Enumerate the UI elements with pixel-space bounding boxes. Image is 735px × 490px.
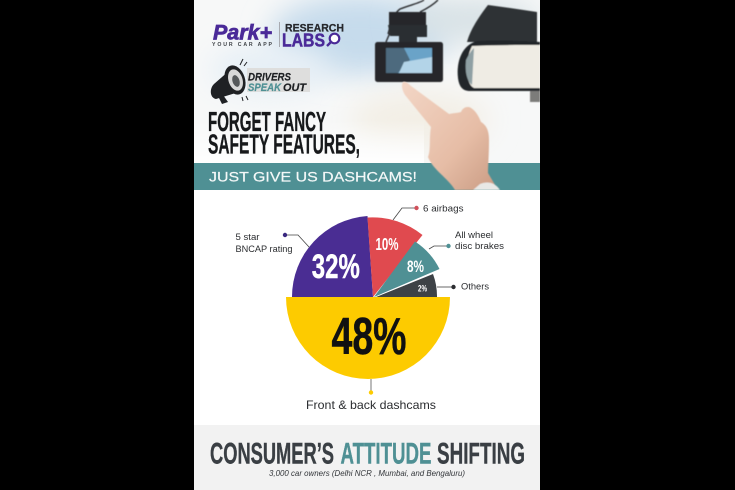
header photo: dashcam and mirror [194,0,540,190]
callout: others [437,282,490,292]
logo: Park+: YOUR CAR APP [212,42,273,48]
slice: BNCAP 32% [292,216,373,297]
banner text: JUST GIVE US DASHCAMS! [209,168,417,184]
rear view mirror [458,5,540,102]
callout: 5 star BNCAP rating [236,232,309,254]
white poster panel [194,0,540,490]
callout: 6 airbags: 6 airbags [423,204,464,214]
logo: Park+: Park+ [213,22,272,44]
value labels [312,234,427,366]
callout: all wheel disc brakes [429,230,505,251]
infographic canvas [194,0,540,490]
dashcam device [375,0,443,82]
hand pointing at dashcam [402,82,500,190]
headline: SAFETY FEATURES, [208,128,360,160]
headline [208,106,360,160]
logo: Research Labs: LABS [282,30,325,50]
footer title: CONSUMER’S [210,438,334,470]
slice: others 2% [376,274,437,297]
footer panel: SHIFTING [437,438,525,470]
value labels: 10% [376,234,399,254]
slice: dashcams 48% [286,297,450,379]
headline: FORGET FANCY [208,106,326,137]
value labels: 48% [332,308,406,366]
pie chart [286,216,450,379]
drivers speak out badge: SPEAK [248,82,282,94]
logo: Research Labs [282,22,344,50]
slice: disc brakes 8% [374,242,440,297]
teal banner [194,163,540,190]
icon: megaphone [211,59,249,104]
callout: 5 star BNCAP rating: 5 star [236,232,260,242]
callout: others: Others [461,282,490,292]
drivers speak out badge [247,68,310,94]
callout: all wheel disc brakes: All wheel [455,230,493,240]
value labels: 8% [407,257,424,276]
drivers speak out badge: OUT [283,82,307,94]
callout: all wheel disc brakes: disc brakes [455,241,505,251]
callout: front and back dashcams [306,379,436,412]
logo: Research Labs: RESEARCH [285,22,344,34]
slice: airbags 10% [368,217,422,297]
logo divider [278,22,281,47]
callout: front and back dashcams: Front & back dashcams [306,398,436,412]
footer panel [194,425,540,490]
callout: 5 star BNCAP rating: BNCAP rating [236,244,292,254]
footer panel: ATTITUDE [340,438,432,470]
value labels: 32% [312,248,360,286]
footer subtitle: 3,000 car owners (Delhi NCR , Mumbai, and Bengaluru) [269,469,465,478]
drivers speak out badge: DRIVERS [248,72,292,84]
value labels: 2% [418,284,427,294]
callout: 6 airbags [393,204,464,220]
